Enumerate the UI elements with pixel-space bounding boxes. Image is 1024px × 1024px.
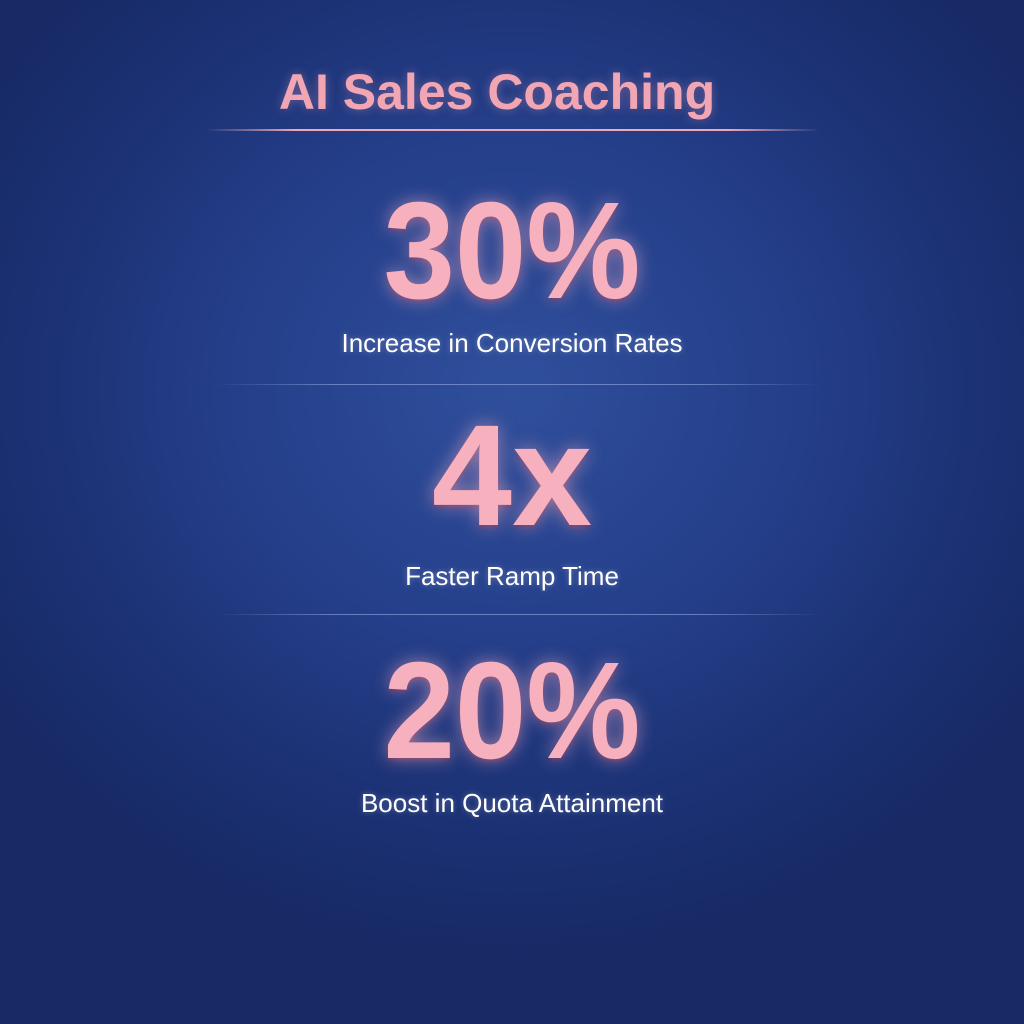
label quota: Boost in Quota Attainment — [361, 788, 663, 818]
number 20%: 20% — [384, 634, 640, 788]
number 4x: 4x — [432, 395, 592, 556]
label conversion: Increase in Conversion Rates — [341, 328, 683, 358]
title: AI Sales Coaching — [279, 64, 715, 120]
stat: 30% — [341, 174, 684, 358]
title underline — [205, 129, 820, 131]
stat: 20% — [360, 634, 664, 818]
label ramp time: Faster Ramp Time — [405, 561, 619, 591]
number 30%: 30% — [384, 174, 640, 328]
stat: 4x — [404, 395, 620, 591]
